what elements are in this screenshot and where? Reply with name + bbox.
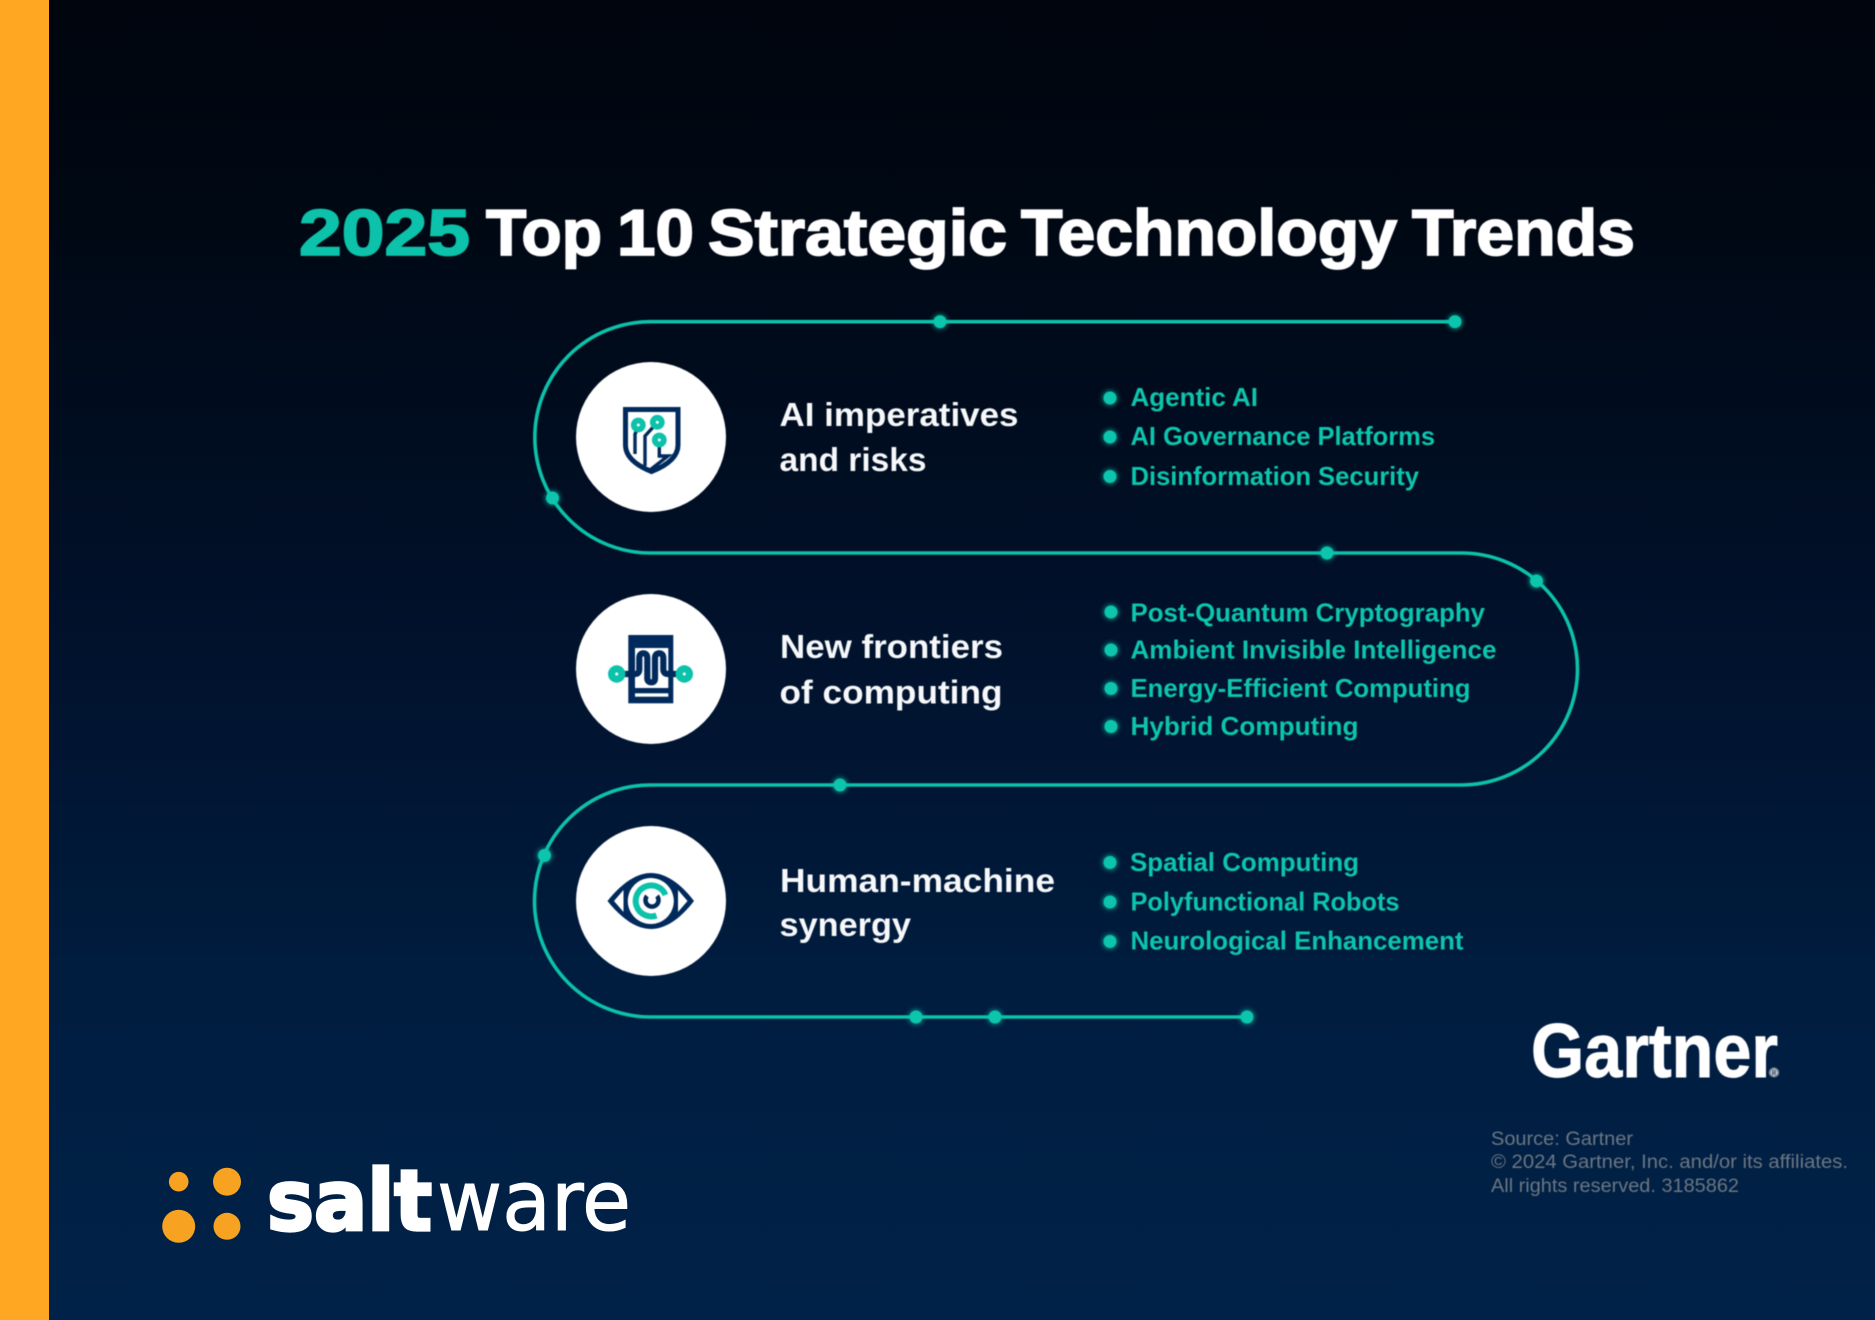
source note: © 2024 Gartner, Inc. and/or its affiliates. [1491, 1152, 1848, 1173]
panel: AI imperatives and risks [576, 362, 1435, 512]
list: computing trends: Hybrid Computing [1130, 711, 1358, 741]
title: Technology [1021, 196, 1397, 269]
source note [1491, 1129, 1848, 1197]
heading: New frontiers of computing [780, 628, 1003, 710]
list: human-machine trends [1104, 847, 1464, 956]
title: Strategic [708, 196, 1007, 269]
icon: four orange dots [162, 1168, 241, 1243]
heading: New frontiers of computing: New frontiers [780, 628, 1003, 665]
heading: New frontiers of computing: of computing [780, 674, 1002, 710]
Gartner logo: ® [1770, 1065, 1779, 1080]
icon: circuit shield [576, 362, 726, 512]
list: computing trends [1104, 598, 1496, 741]
list: AI imperatives trends: Disinformation Security [1130, 461, 1420, 491]
list: human-machine trends: Spatial Computing [1130, 847, 1359, 877]
heading: Human-machine synergy: synergy [780, 906, 912, 943]
list: human-machine trends: Polyfunctional Robots [1130, 886, 1400, 916]
list: computing trends: Ambient Invisible Intelligence [1130, 634, 1496, 664]
wordmark [267, 1152, 631, 1250]
source note: All rights reserved. 3185862 [1491, 1176, 1739, 1197]
saltware logo [162, 1152, 631, 1250]
title: Top [486, 196, 602, 269]
heading: AI imperatives and risks: and risks [780, 441, 926, 478]
list: human-machine trends: Neurological Enhancement [1130, 926, 1464, 956]
Gartner logo: Gartner [1531, 1009, 1778, 1094]
wordmark: ware [437, 1152, 631, 1250]
list: computing trends: Post-Quantum Cryptography [1130, 598, 1486, 628]
title: 2025 [299, 196, 470, 269]
orange side bar [0, 0, 49, 1320]
list: AI imperatives trends [1104, 382, 1435, 491]
title: 10 [617, 196, 694, 269]
panel: Human-machine synergy [576, 826, 1464, 976]
wordmark: salt [267, 1152, 432, 1250]
icon: computing chip [576, 594, 726, 744]
title: Trends [1412, 196, 1635, 269]
icon: eye [576, 826, 726, 976]
heading: Human-machine synergy: Human-machine [780, 862, 1055, 899]
panel: New frontiers of computing [576, 594, 1496, 744]
list: AI imperatives trends: Agentic AI [1130, 382, 1258, 412]
serpentine connector line [534, 315, 1578, 1024]
list: computing trends: Energy-Efficient Computing [1130, 673, 1470, 703]
heading: AI imperatives and risks: AI imperatives [780, 396, 1018, 433]
heading: AI imperatives and risks [780, 396, 1018, 478]
title [299, 196, 1635, 269]
heading: Human-machine synergy [780, 862, 1055, 943]
source note: Source: Gartner [1491, 1129, 1634, 1150]
list: AI imperatives trends: AI Governance Platforms [1130, 421, 1435, 451]
